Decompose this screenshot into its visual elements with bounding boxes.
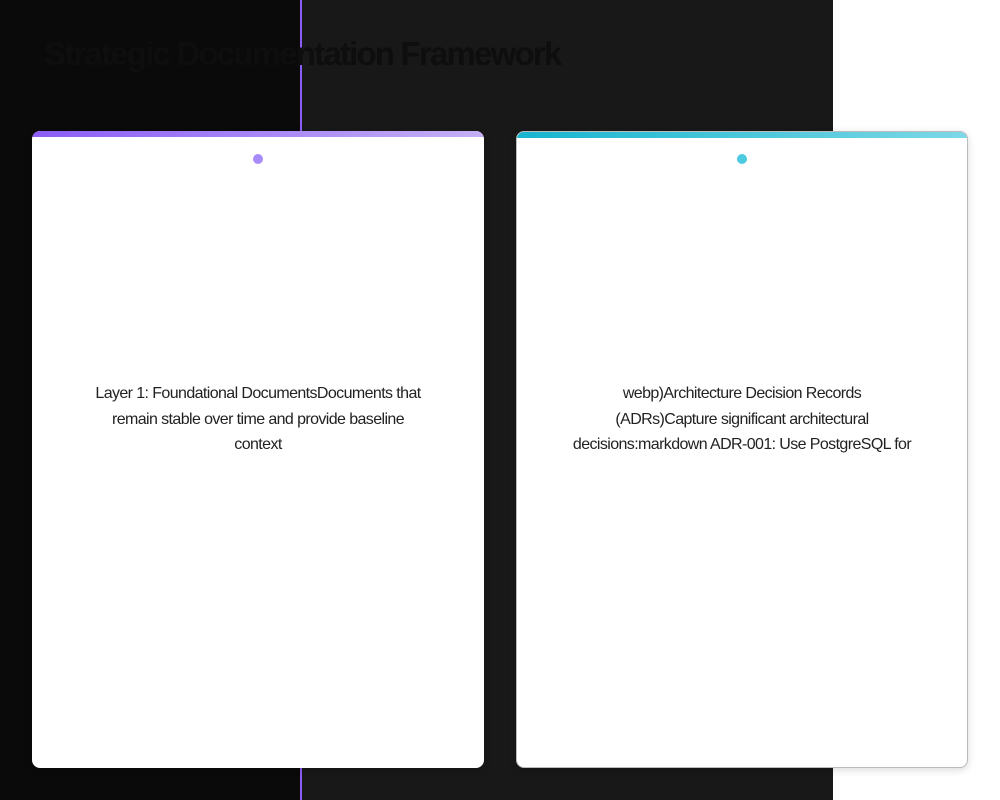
text: ADRs: webp)Architecture Decision Records <box>623 385 861 402</box>
title: Strategic Documentation Framework <box>44 35 560 72</box>
icon: dot cyan <box>737 154 747 164</box>
panel: layer 1 <box>32 131 484 768</box>
panel: ADRs <box>516 131 968 768</box>
icon: dot purple <box>253 154 263 164</box>
text: layer 1: remain stable over time and provide baseline <box>112 410 404 428</box>
text: ADRs: (ADRs)Capture significant architectural <box>615 410 869 428</box>
text: ADRs <box>573 385 912 453</box>
text: layer 1 <box>95 385 422 453</box>
text: layer 1: context <box>234 436 282 453</box>
text: layer 1: Layer 1: Foundational DocumentsDocuments that <box>95 385 421 402</box>
text: ADRs: decisions:markdown ADR-001: Use PostgreSQL for <box>573 436 911 453</box>
